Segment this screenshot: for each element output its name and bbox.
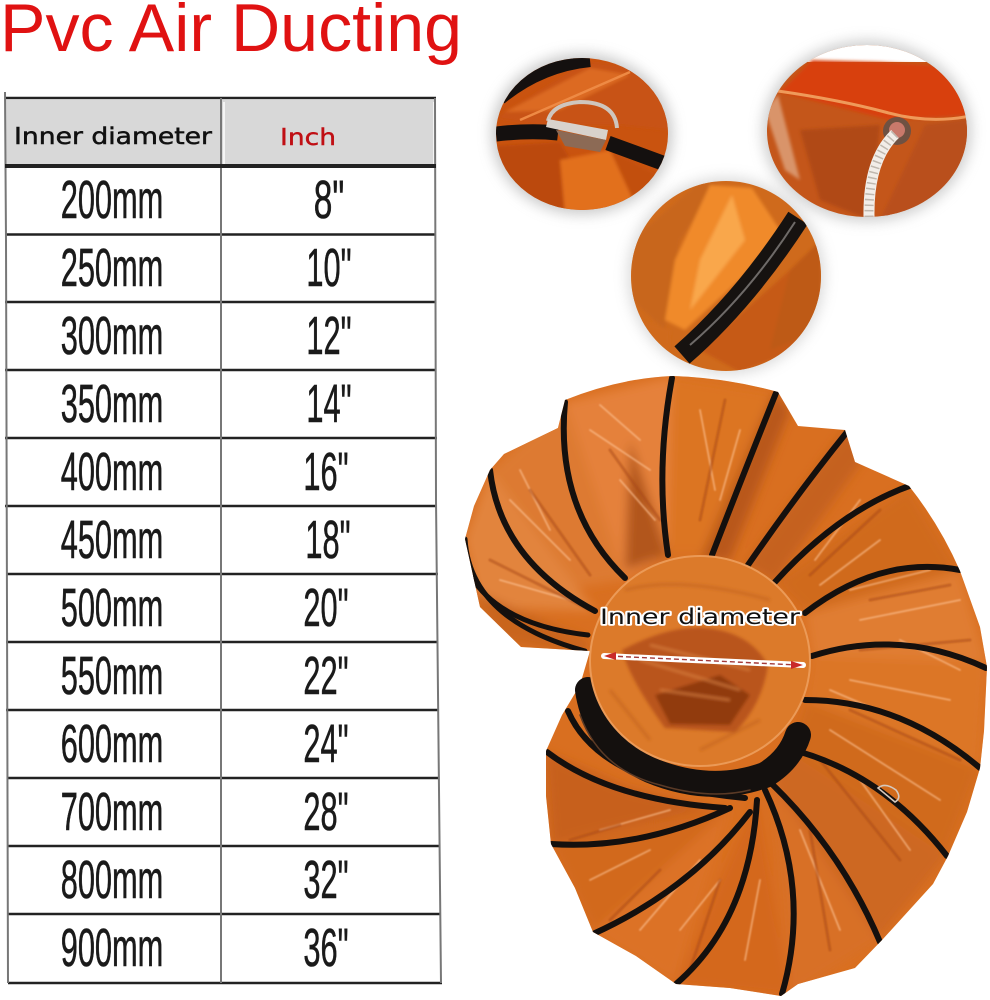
table rows: 12" — [306, 306, 352, 366]
size table — [5, 92, 442, 983]
detail photo: black hoop seam — [628, 178, 824, 375]
table rows: 700mm — [61, 782, 163, 842]
fabric shading facets — [465, 376, 987, 996]
table rows: 14" — [306, 374, 352, 434]
wire hoops — [465, 378, 986, 994]
table rows: 600mm — [61, 714, 163, 774]
inner diameter arrow — [604, 652, 803, 669]
table rows: 36" — [303, 918, 349, 978]
wrinkles — [490, 400, 970, 970]
black coiled hoops under mouth — [580, 690, 798, 794]
table rows: 18" — [305, 510, 351, 570]
table rows: 250mm — [61, 238, 163, 298]
table rows: 800mm — [61, 850, 163, 910]
detail photo: D-ring on hoop — [492, 54, 672, 215]
table rows: 22" — [303, 646, 349, 706]
table rows: 10" — [306, 238, 352, 298]
table rows: 550mm — [61, 646, 163, 706]
table rows — [61, 169, 352, 978]
table rows: 450mm — [61, 510, 163, 570]
ducting photo — [450, 370, 990, 1000]
table rows: 900mm — [61, 918, 163, 978]
table rows: 200mm — [61, 170, 163, 230]
table rows: 16" — [303, 442, 349, 502]
table header — [6, 100, 436, 166]
table rows: 32" — [303, 850, 349, 910]
table header: Inch — [280, 125, 336, 151]
table rows: 300mm — [61, 306, 163, 366]
detail photo: rope through eyelet — [760, 40, 975, 221]
small D-ring on duct — [878, 785, 899, 802]
table header: Inner diameter — [14, 124, 213, 150]
table rows: 20" — [303, 578, 349, 638]
table rows: 350mm — [61, 374, 163, 434]
duct body — [450, 370, 990, 1000]
table rows: 8" — [314, 169, 344, 230]
table rows: 24" — [303, 714, 349, 774]
table rows: 400mm — [61, 442, 163, 502]
table rows: 28" — [303, 782, 349, 842]
table rows: 500mm — [61, 578, 163, 638]
duct mouth ring — [590, 556, 810, 766]
inner diameter label: Inner diameter — [600, 605, 800, 629]
